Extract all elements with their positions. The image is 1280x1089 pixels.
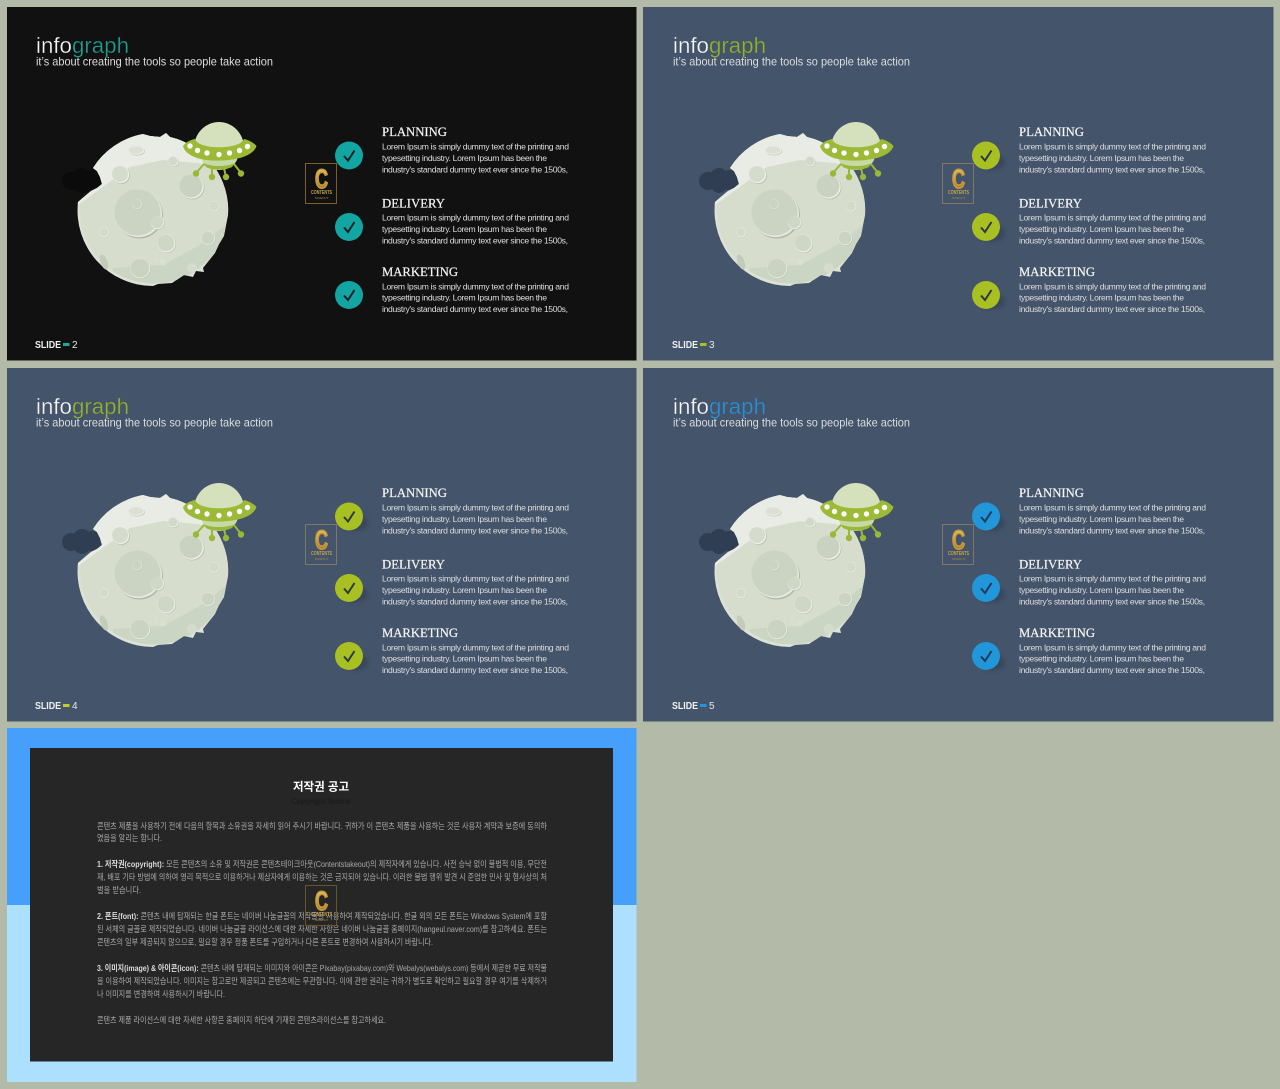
text: delivery (382, 558, 569, 606)
logo (306, 164, 336, 204)
footer: slide number (35, 340, 78, 351)
text: delivery: DELIVERY (1019, 196, 1082, 210)
text: delivery: industry's standard dummy text ever since the 1500s, (382, 236, 568, 246)
icon: cloud (699, 168, 739, 193)
text: marketing: industry's standard dummy text ever since the 1500s, (1019, 304, 1205, 314)
logo: C (952, 164, 965, 194)
text: delivery: typesetting industry. Lorem Ipsum has been the (1019, 224, 1184, 234)
subtitle: it’s about creating the tools so people take action (673, 416, 910, 430)
icon: check planning (335, 142, 363, 170)
text: marketing: Lorem Ipsum is simply dummy text of the printing and (382, 282, 569, 292)
icon: check marketing (335, 281, 363, 309)
text: marketing: industry's standard dummy text ever since the 1500s, (382, 665, 568, 675)
heading: copyright title: 저작권 공고 (293, 780, 349, 794)
text: marketing: typesetting industry. Lorem Ipsum has been the (382, 292, 547, 302)
text: clause 1 copyright: 1. 저작권(copyright): 모든 콘텐츠의 소유 및 저작권은 콘텐츠테이크아웃(Contentstakeout)의 제작자에게 있습니다. 사전 승낙 없이 불법적 이용, 무단전 (97, 859, 547, 869)
footer: slide number: 4 (72, 701, 78, 712)
text: delivery (1019, 196, 1206, 246)
title: infograph (673, 394, 766, 419)
panel: slide 3 (643, 7, 1274, 360)
text: delivery: Lorem Ipsum is simply dummy text of the printing and (382, 212, 569, 222)
text: clause 1 copyright (97, 859, 547, 895)
text: delivery: Lorem Ipsum is simply dummy text of the printing and (1019, 212, 1206, 222)
text: planning: PLANNING (1019, 486, 1084, 500)
icon: check marketing (972, 642, 1005, 670)
footer: slide number (672, 701, 715, 712)
subtitle: it’s about creating the tools so people take action (36, 54, 273, 68)
logo: CONTENTS (311, 912, 333, 918)
panel: slide 2 (7, 7, 636, 360)
footer: slide number: 2 (72, 340, 78, 351)
text: delivery: DELIVERY (382, 558, 445, 572)
icon: check delivery (972, 574, 1005, 602)
logo (306, 524, 336, 564)
text: marketing: MARKETING (1019, 265, 1095, 279)
logo (306, 886, 336, 926)
panel: slide 4 (7, 368, 636, 722)
text: intro: 였음을 알리는 합니다. (97, 833, 162, 843)
text: planning: industry's standard dummy text ever since the 1500s, (1019, 164, 1205, 174)
text: planning: typesetting industry. Lorem Ipsum has been the (1019, 514, 1184, 524)
text: delivery: industry's standard dummy text ever since the 1500s, (1019, 236, 1205, 246)
text: intro: 콘텐츠 제품을 사용하기 전에 다음의 항목과 소유권을 자세히 읽어 주시기 바랍니다. 귀하가 이 콘텐츠 제품을 사용하는 것은 사용자 계약과 보증에 동의하 (97, 821, 547, 831)
illustration: ufo (820, 483, 894, 541)
text: planning (382, 125, 569, 174)
footer: slide number (35, 701, 78, 712)
logo: TAKEOUT (315, 918, 329, 922)
text: clause 3 image and icon (97, 963, 547, 999)
logo (942, 164, 974, 204)
icon: check planning (972, 142, 1005, 170)
title: infograph (673, 33, 766, 58)
icon: cloud (62, 529, 102, 554)
illustration: moon (707, 486, 877, 656)
logo: CONTENTS (948, 551, 970, 557)
text: license note: 콘텐츠 제품 라이선스에 대한 자세한 사항은 홈페이지 하단에 기재된 콘텐츠라이선스를 참고하세요. (97, 1015, 386, 1025)
illustration: ufo (183, 122, 256, 180)
text: planning: PLANNING (382, 486, 447, 500)
illustration: ufo (183, 483, 256, 541)
icon: check planning (335, 502, 368, 531)
footer: slide number: SLIDE (35, 340, 61, 351)
illustration: moon (70, 486, 240, 656)
title: infograph (36, 394, 129, 419)
text: marketing (1019, 265, 1206, 314)
text: planning: industry's standard dummy text ever since the 1500s, (1019, 526, 1205, 536)
text: marketing: MARKETING (382, 265, 458, 279)
text: planning: typesetting industry. Lorem Ipsum has been the (382, 153, 547, 163)
text: clause 2 font (97, 911, 547, 947)
footer: slide number: 3 (709, 340, 715, 351)
logo (942, 524, 974, 564)
text: delivery: DELIVERY (1019, 558, 1082, 572)
text: marketing (382, 626, 569, 675)
text: marketing: MARKETING (1019, 626, 1095, 640)
footer: slide number: 5 (709, 701, 715, 712)
text: planning: typesetting industry. Lorem Ipsum has been the (1019, 153, 1184, 163)
text: clause 1 copyright: 벌을 받습니다. (97, 885, 141, 895)
logo: CONTENTS (948, 190, 970, 196)
logo: CONTENTS (311, 190, 333, 196)
icon: check delivery (335, 213, 363, 241)
text: delivery: DELIVERY (382, 196, 445, 210)
logo: CONTENTS (311, 551, 333, 557)
text: clause 3 image and icon: 을 이용하여 제작되었습니다. 이미지는 참고로만 제공되고 콘텐츠에는 무관합니다. 이에 관한 권리는 귀하가 별도로 확인하고 필요할 경우 여기를 삭제하거 (97, 976, 547, 986)
text: delivery: Lorem Ipsum is simply dummy text of the printing and (1019, 574, 1206, 584)
footer: slide number (672, 340, 715, 351)
text: marketing (1019, 626, 1206, 675)
illustration: ufo (820, 122, 894, 180)
text: planning (382, 486, 569, 536)
text: marketing (382, 265, 569, 314)
icon: check delivery (335, 574, 368, 602)
text: planning: Lorem Ipsum is simply dummy text of the printing and (1019, 502, 1206, 512)
text: delivery: typesetting industry. Lorem Ipsum has been the (1019, 585, 1184, 595)
icon: check marketing (335, 642, 368, 670)
logo: C (952, 525, 965, 555)
text: marketing: industry's standard dummy text ever since the 1500s, (1019, 665, 1205, 675)
logo: C (315, 886, 328, 916)
logo: C (315, 525, 328, 555)
panel: slide 5 (643, 368, 1274, 722)
text: delivery (382, 196, 569, 246)
text: marketing: typesetting industry. Lorem Ipsum has been the (1019, 654, 1184, 664)
text: delivery: industry's standard dummy text ever since the 1500s, (1019, 596, 1205, 606)
text: marketing: Lorem Ipsum is simply dummy text of the printing and (382, 642, 569, 652)
text: clause 3 image and icon: 3. 이미지(image) & 아이콘(icon): 콘텐츠 내에 탑재되는 이미지와 아이콘은 Pixabay(pixabay.com)와 Webalys(webalys.com) 등에서 제공한 무료 저작물 (97, 963, 547, 973)
icon: check delivery (972, 213, 1005, 242)
footer: slide number: SLIDE (672, 701, 698, 712)
text: planning (1019, 125, 1206, 174)
text: clause 2 font: 된 서체의 글꼴로 제작되었습니다. 네이버 나눔글꼴 라이선스에 대한 자세한 사항은 네이버 나눔글꼴 홈페이지(hangeul.naver.com)를 참고하세요. 폰트는 (97, 924, 547, 934)
text: marketing: MARKETING (382, 626, 458, 640)
logo: TAKEOUT (315, 557, 329, 561)
logo: TAKEOUT (952, 196, 966, 200)
heading: copyright subtitle: Copyright Notice (291, 797, 351, 806)
text: delivery (1019, 558, 1206, 606)
logo: C (315, 164, 328, 194)
text: delivery: Lorem Ipsum is simply dummy text of the printing and (382, 574, 569, 584)
text: marketing: Lorem Ipsum is simply dummy text of the printing and (1019, 282, 1206, 292)
illustration: moon (707, 125, 877, 295)
title: infograph (36, 33, 129, 58)
icon: cloud (699, 529, 739, 554)
text: planning: Lorem Ipsum is simply dummy text of the printing and (1019, 142, 1206, 152)
footer: slide number: SLIDE (35, 701, 61, 712)
text: planning: industry's standard dummy text ever since the 1500s, (382, 526, 568, 536)
logo: TAKEOUT (315, 196, 329, 200)
text: intro (97, 821, 547, 843)
text: planning: Lorem Ipsum is simply dummy text of the printing and (382, 502, 569, 512)
text: delivery: typesetting industry. Lorem Ipsum has been the (382, 585, 547, 595)
text: planning: PLANNING (382, 125, 447, 139)
icon: check marketing (972, 281, 1005, 310)
illustration: moon (70, 125, 240, 295)
subtitle: it’s about creating the tools so people take action (36, 416, 273, 430)
text: marketing: typesetting industry. Lorem Ipsum has been the (382, 654, 547, 664)
subtitle: it’s about creating the tools so people take action (673, 54, 910, 68)
text: planning (1019, 486, 1206, 536)
text: clause 3 image and icon: 나 이미지를 변경하여 사용하시기 바랍니다. (97, 989, 225, 999)
text: planning: typesetting industry. Lorem Ipsum has been the (382, 514, 547, 524)
icon: cloud (62, 168, 102, 193)
footer: slide number: SLIDE (672, 340, 698, 351)
text: planning: Lorem Ipsum is simply dummy text of the printing and (382, 142, 569, 152)
text: delivery: typesetting industry. Lorem Ipsum has been the (382, 224, 547, 234)
text: delivery: industry's standard dummy text ever since the 1500s, (382, 596, 568, 606)
text: planning: PLANNING (1019, 125, 1084, 139)
text: marketing: industry's standard dummy text ever since the 1500s, (382, 304, 568, 314)
text: clause 1 copyright: 재, 배포 기타 방법에 의하여 영리 목적으로 이용하거나 제삼자에게 이용하는 것은 금지되어 있습니다. 이러한 불법 행위 발견 시 준엄한 민사 및 형사상의 처 (97, 872, 547, 882)
text: marketing: Lorem Ipsum is simply dummy text of the printing and (1019, 642, 1206, 652)
logo: TAKEOUT (952, 557, 966, 561)
icon: check planning (972, 502, 1005, 531)
text: clause 2 font: 콘텐츠의 일부 제공되지 않으므로, 필요할 경우 정품 폰트를 구입하거나 다른 폰트로 변경하여 사용하시기 바랍니다. (97, 937, 433, 947)
text: marketing: typesetting industry. Lorem Ipsum has been the (1019, 292, 1184, 302)
panel: copyright notice (7, 728, 636, 1082)
text: planning: industry's standard dummy text ever since the 1500s, (382, 164, 568, 174)
text: clause 2 font: 2. 폰트(font): 콘텐츠 내에 탑재되는 한글 폰트는 네이버 나눔글꼴의 저작물을 사용하여 제작되었습니다. 한글 외의 모든 폰트는 Windows System에 포함 (97, 911, 547, 921)
